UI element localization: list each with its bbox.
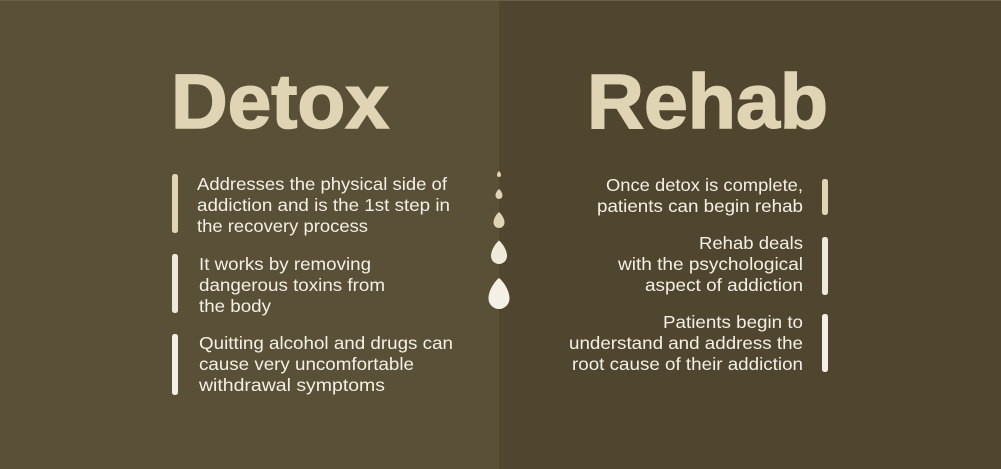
icon: drop 5 xyxy=(488,278,510,309)
panel background: detox xyxy=(0,0,499,469)
text: point 2 xyxy=(199,254,385,316)
detox point 3 xyxy=(172,333,453,395)
bar: point 2 xyxy=(822,237,828,295)
text: point 1: Once detox is complete, xyxy=(606,175,803,195)
bar: point 1 xyxy=(172,174,178,233)
text: point 2: the body xyxy=(199,296,271,316)
text: point 2: Rehab deals xyxy=(699,233,803,253)
icon: drop 2 xyxy=(496,189,502,199)
heading: Rehab: Rehab xyxy=(587,59,828,145)
text: point 2 xyxy=(617,233,803,295)
icon: drop 3 xyxy=(494,212,504,228)
text: point 1: addiction and is the 1st step in xyxy=(197,195,450,215)
detox point 2 xyxy=(172,254,385,316)
panel: detox xyxy=(0,0,499,469)
text: point 3: root cause of their addiction xyxy=(572,354,803,374)
text: point 1 xyxy=(597,175,803,216)
text: point 2: It works by removing xyxy=(199,254,371,274)
bar: point 3 xyxy=(172,334,178,395)
icon: water drops xyxy=(488,171,510,309)
text: point 3: cause very uncomfortable xyxy=(199,354,414,374)
bar: point 1 xyxy=(822,179,828,215)
text: point 3: Quitting alcohol and drugs can xyxy=(199,333,453,353)
rehab point 3 xyxy=(569,312,828,374)
heading: Detox: Detox xyxy=(171,59,389,145)
text: point 3: withdrawal symptoms xyxy=(198,375,385,395)
detox point 1 xyxy=(172,174,450,236)
rehab point 1 xyxy=(597,175,828,216)
text: point 1: patients can begin rehab xyxy=(597,196,803,216)
icon: drop 1 xyxy=(497,171,501,177)
text: point 1: the recovery process xyxy=(197,216,368,236)
text: point 2: with the psychological xyxy=(617,254,803,274)
panel: rehab xyxy=(499,0,1001,469)
text: point 3 xyxy=(198,333,453,395)
top edge highlight xyxy=(0,0,1001,1)
text: point 2: aspect of addiction xyxy=(645,275,803,295)
text: point 2: dangerous toxins from xyxy=(199,275,385,295)
text: point 3: understand and address the xyxy=(569,333,803,353)
text: point 3: Patients begin to xyxy=(663,312,803,332)
bar: point 3 xyxy=(822,314,828,372)
text: point 3 xyxy=(569,312,803,374)
panel background: rehab xyxy=(499,0,1001,469)
text: point 1 xyxy=(197,174,450,236)
text: point 1: Addresses the physical side of xyxy=(197,174,447,194)
rehab point 2 xyxy=(617,233,828,295)
icon: drop 4 xyxy=(491,240,507,264)
bar: point 2 xyxy=(172,254,178,313)
